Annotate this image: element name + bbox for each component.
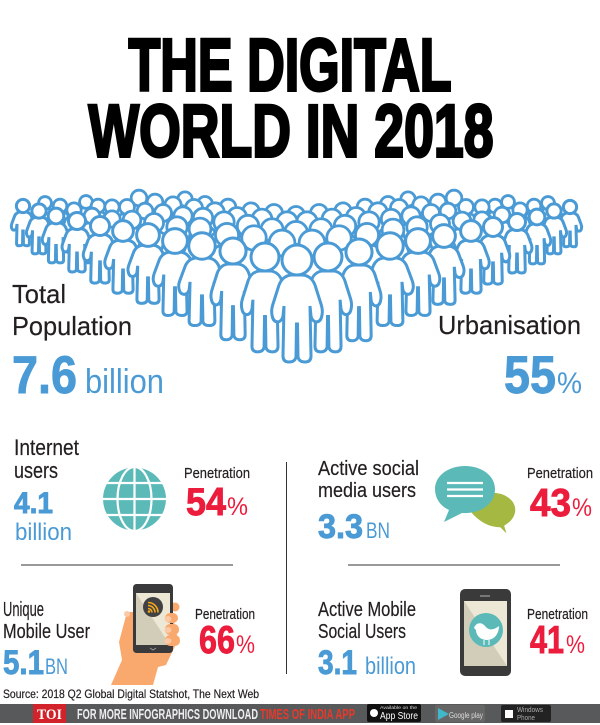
total population stat: 7.6 [12, 346, 77, 405]
urbanisation stat: % [557, 367, 582, 400]
social users penetration: 41 [530, 619, 564, 662]
active mobile social users text: Active Mobile [318, 599, 416, 621]
footer bar: FOR MORE INFOGRAPHICS DOWNLOAD [77, 706, 258, 723]
internet users text: billion [15, 519, 72, 546]
title [88, 24, 494, 172]
mobile penetration [195, 606, 255, 662]
unique mobile user text [3, 599, 90, 682]
total population stat [12, 279, 164, 405]
app store badge: App Store [380, 711, 418, 722]
active mobile social users text: Social Users [318, 621, 406, 643]
google play badge: Google play [449, 711, 483, 720]
footer bar [0, 704, 600, 723]
internet penetration: 54 [186, 481, 226, 524]
icon: globe [103, 467, 166, 531]
active mobile social users text: billion [365, 653, 416, 680]
mobile penetration: 66 [199, 619, 235, 662]
active social media users text: media users [318, 480, 416, 502]
urbanisation stat [438, 310, 582, 405]
active mobile social users text [318, 599, 416, 682]
active social media users text: BN [366, 518, 390, 543]
windows phone badge: Windows [517, 707, 543, 714]
internet penetration [184, 465, 250, 524]
total population stat: billion [85, 363, 164, 401]
internet penetration: % [227, 493, 248, 521]
unique mobile user text: BN [45, 654, 68, 679]
TOI logo [33, 704, 66, 723]
windows phone badge [501, 705, 551, 722]
social media penetration: % [572, 494, 592, 522]
icon: phone with bird [460, 589, 511, 676]
footer bar: TIMES OF INDIA APP [260, 706, 355, 723]
icon: speech bubbles [435, 466, 516, 536]
icon: hand holding phone [111, 584, 180, 685]
unique mobile user text: Unique [3, 599, 44, 621]
mobile penetration: Penetration [195, 606, 255, 623]
unique mobile user text: Mobile User [3, 621, 90, 643]
app store badge: Available on the [380, 705, 418, 710]
unique mobile user text: 5.1 [3, 644, 44, 682]
social media penetration [527, 465, 593, 525]
urbanisation stat: Urbanisation [438, 310, 581, 340]
windows phone badge: Phone [517, 715, 535, 722]
internet penetration: Penetration [184, 465, 250, 482]
internet users text [14, 435, 79, 546]
internet users text: users [14, 458, 58, 483]
active social media users text: Active social [318, 458, 419, 480]
total population stat: Total [12, 279, 66, 309]
internet users text: 4.1 [14, 487, 53, 520]
TOI logo: TOI [37, 707, 62, 723]
title: THE DIGITAL [128, 24, 452, 106]
urbanisation stat: 55 [504, 346, 556, 405]
total population stat: Population [12, 311, 132, 341]
social users penetration: % [566, 631, 585, 659]
social users penetration [527, 606, 588, 662]
active mobile social users text: 3.1 [318, 644, 357, 682]
google play badge [435, 705, 485, 722]
active social media users text: 3.3 [318, 508, 363, 546]
source note: Source: 2018 Q2 Global Digital Statshot, The Next Web [3, 687, 259, 701]
mobile penetration: % [236, 631, 255, 659]
active social media users text [318, 458, 419, 546]
crowd illustration [11, 190, 582, 362]
app store badge [367, 704, 421, 722]
social media penetration: 43 [530, 482, 571, 525]
internet users text: Internet [14, 435, 79, 460]
